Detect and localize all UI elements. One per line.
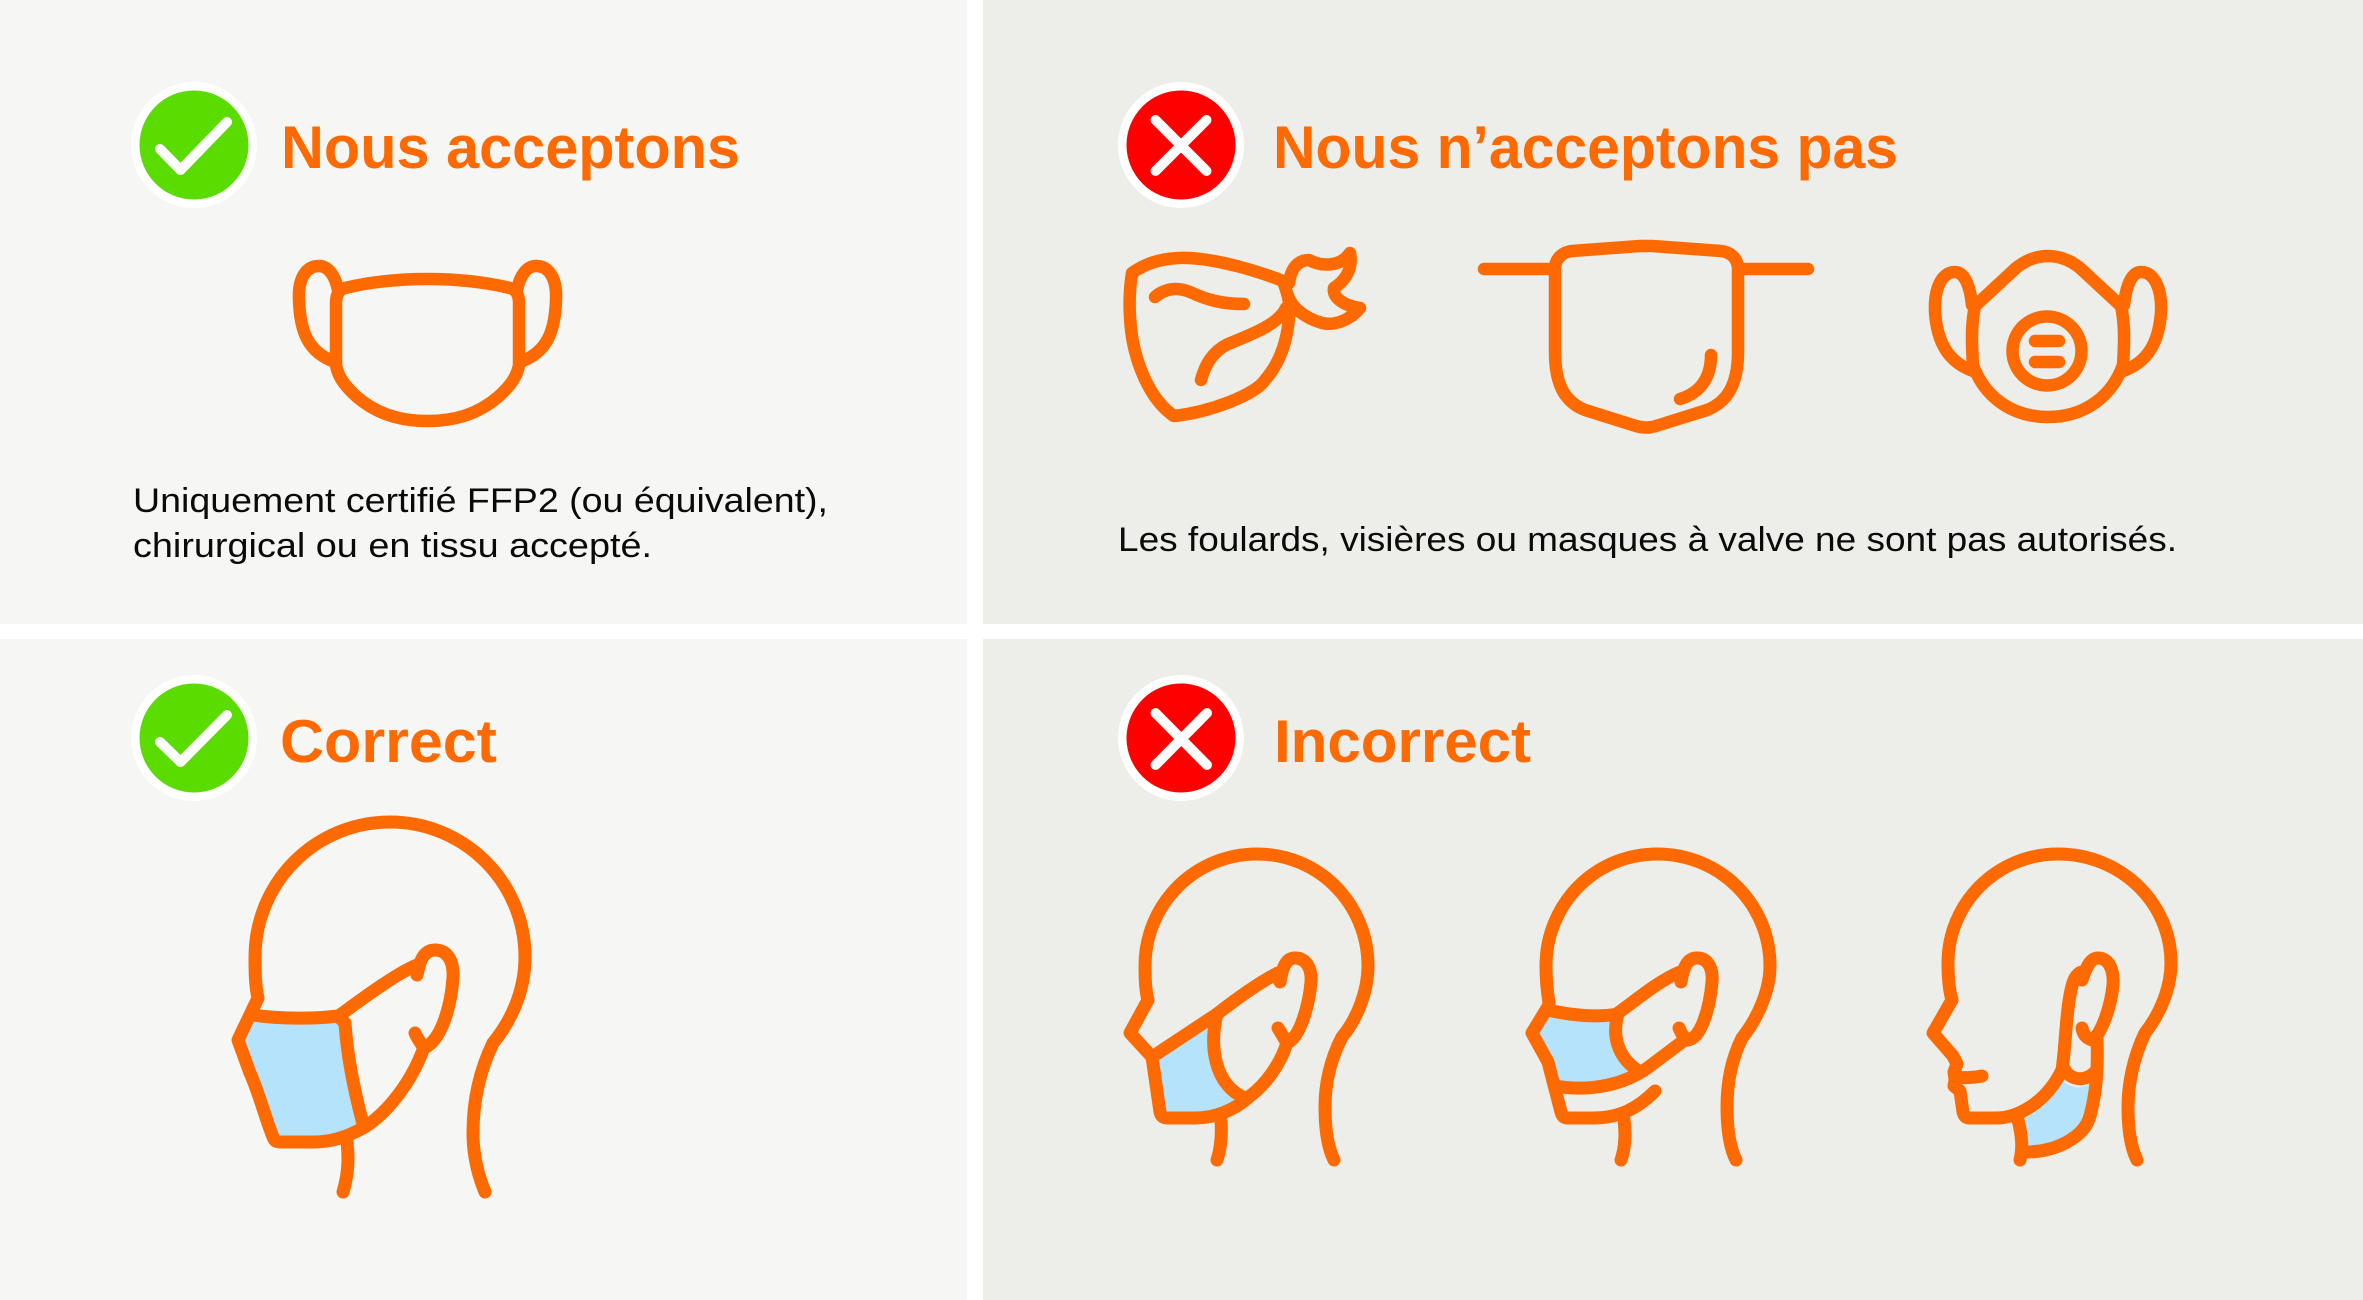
icon: surgical mask: [299, 266, 556, 421]
panel: incorrect: [983, 639, 2363, 1300]
text: accepted masks: Uniquement certifié FFP2 (ou équivalent),: [133, 482, 828, 520]
icon: red cross badge: [1118, 675, 1244, 801]
icon: green check badge: [131, 82, 257, 208]
icon: scarf: [1130, 253, 1360, 416]
heading: correct: Correct: [280, 708, 497, 775]
panel: correct: [0, 639, 967, 1300]
text: refused masks: Les foulards, visières ou masques à valve ne sont pas autorisés.: [1118, 521, 2177, 559]
heading: incorrect: Incorrect: [1274, 708, 1531, 775]
heading: nous acceptons: Nous acceptons: [281, 114, 740, 181]
illustration: mask worn correctly: [238, 822, 525, 1192]
panel: nous acceptons: [0, 0, 967, 624]
text: accepted masks: chirurgical ou en tissu accepté.: [133, 527, 652, 565]
heading: nous n'acceptons pas: Nous n’acceptons pas: [1273, 114, 1898, 181]
icon: red cross badge: [1118, 82, 1244, 208]
illustration: mask under chin: [1933, 854, 2171, 1160]
illustration: chin uncovered: [1532, 854, 1770, 1160]
illustration: nose uncovered: [1130, 854, 1368, 1160]
icon: green check badge: [131, 675, 257, 801]
panel: nous n'acceptons pas: [983, 0, 2363, 624]
icon: face shield: [1484, 246, 1808, 428]
icon: valve mask: [1935, 256, 2161, 417]
